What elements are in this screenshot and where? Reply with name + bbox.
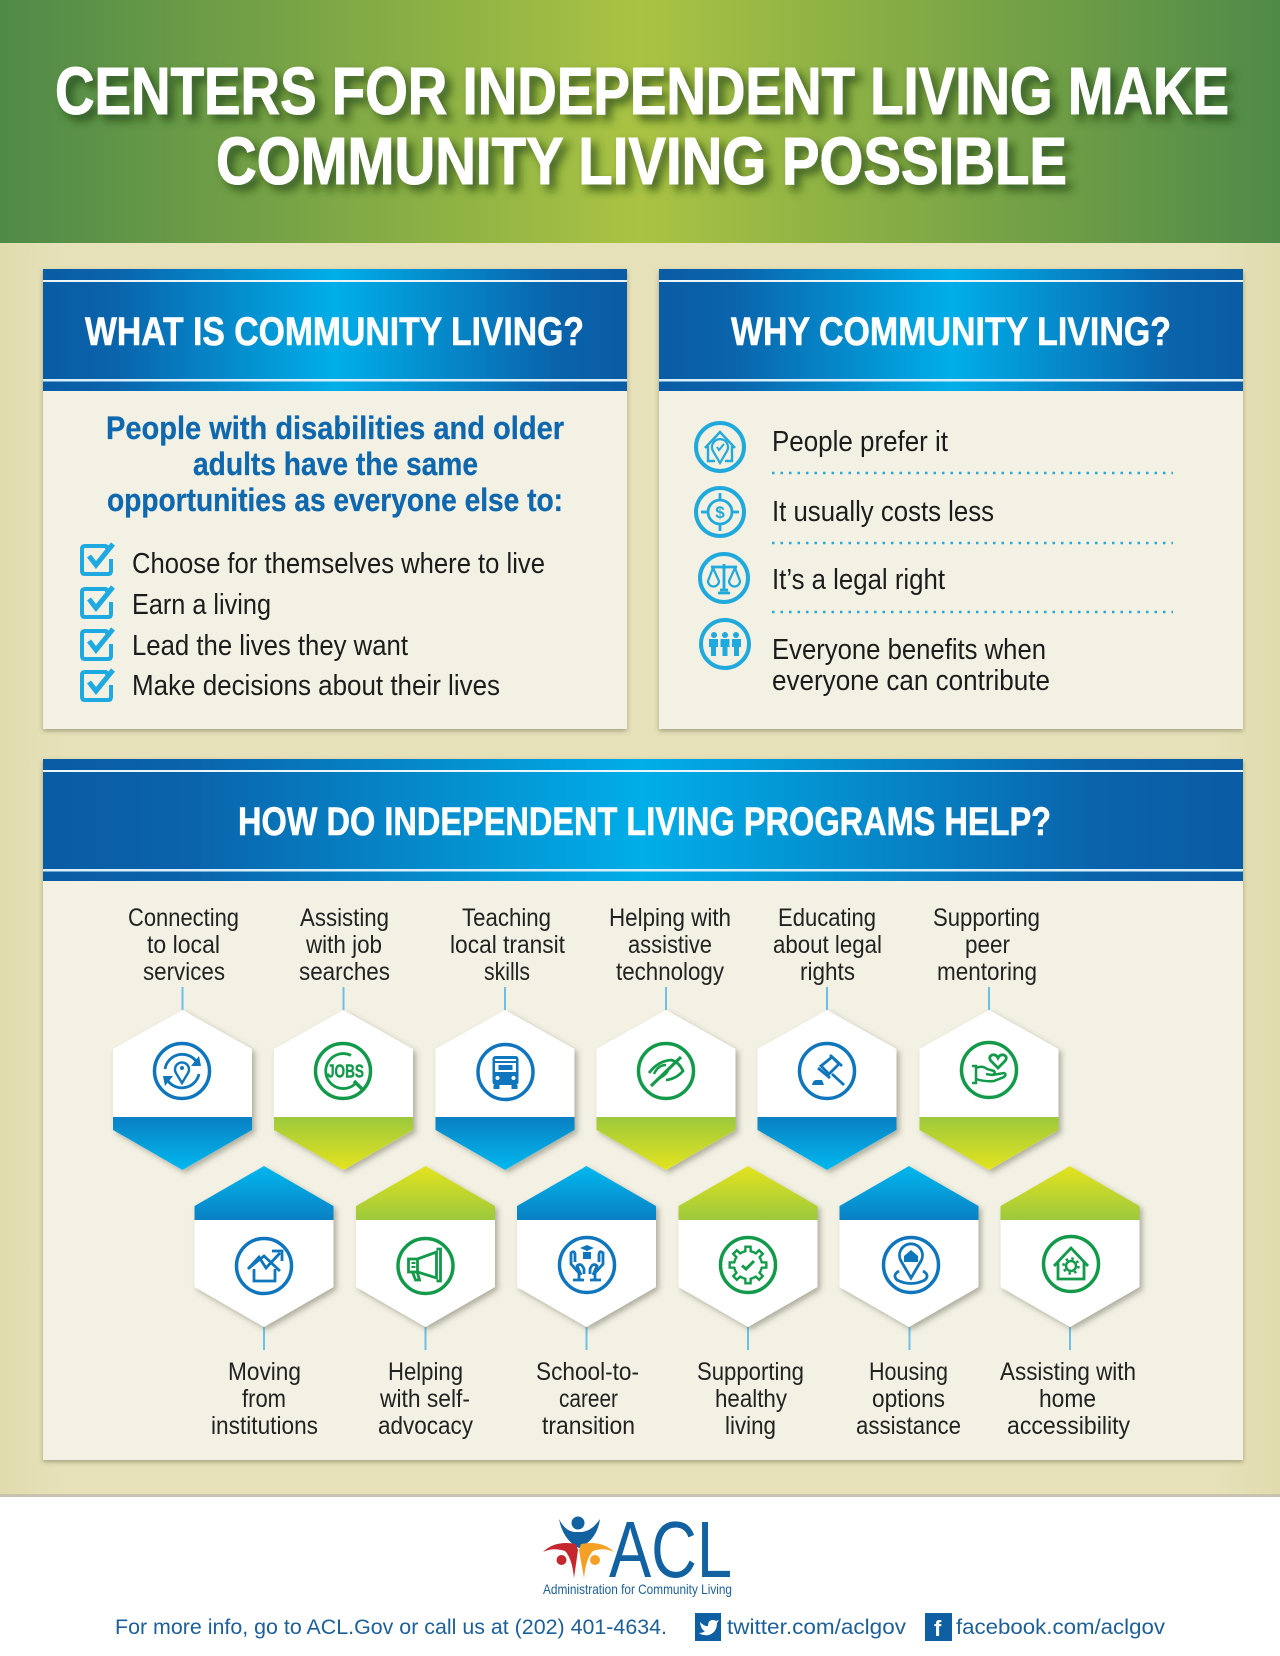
program: connecting to local services xyxy=(113,904,252,1170)
subheading: opportunities as everyone else to: xyxy=(107,482,563,518)
program: housing options assistance: options xyxy=(872,1385,945,1413)
title xyxy=(55,54,1229,199)
icon: house with gear xyxy=(1044,1236,1098,1292)
subheading: People with disabilities and older xyxy=(106,410,564,446)
ACL logo xyxy=(543,1505,732,1597)
icon: gear with check xyxy=(720,1238,776,1292)
facebook link: facebook.com/aclgov xyxy=(956,1616,1166,1639)
panel: why community living xyxy=(659,269,1243,729)
ACL logo: ACL xyxy=(609,1505,732,1594)
facebook link xyxy=(925,1613,1166,1641)
twitter link xyxy=(695,1613,907,1641)
program: moving from institutions: from xyxy=(242,1385,286,1413)
icon: megaphone xyxy=(398,1238,453,1294)
icon: gavel xyxy=(800,1044,854,1098)
panel header xyxy=(659,269,1243,391)
twitter link: twitter.com/aclgov xyxy=(727,1616,907,1639)
program: housing options assistance: Housing xyxy=(869,1358,948,1386)
reason: legal right: It’s a legal right xyxy=(772,564,945,596)
program: assisting with job searches: Assisting xyxy=(300,904,389,932)
program: educating about legal rights: about legal xyxy=(773,931,882,959)
panel: how do independent living programs help xyxy=(43,759,1243,1460)
icon: location sync xyxy=(154,1044,210,1098)
footer xyxy=(0,1494,1280,1656)
icon: eye slashed xyxy=(638,1044,694,1098)
subheading xyxy=(106,410,564,518)
program: school-to-career transition: School-to- xyxy=(536,1358,639,1386)
program: housing options assistance: assistance xyxy=(856,1412,961,1440)
program: educating about legal rights xyxy=(758,904,896,1170)
program: helping with assistive technology: Helping with xyxy=(609,904,731,932)
program: supporting healthy living: healthy xyxy=(715,1385,787,1413)
program: teaching local transit skills: skills xyxy=(484,958,530,986)
program: helping with assistive technology: technology xyxy=(616,958,724,986)
program: supporting peer mentoring: Supporting xyxy=(933,904,1040,932)
icon: jobs magnifier: JOBS xyxy=(327,1062,364,1082)
panel header xyxy=(43,759,1243,881)
program: helping with assistive technology xyxy=(596,904,736,1170)
program: helping with self-advocacy: advocacy xyxy=(378,1412,473,1440)
icon: hand with heart xyxy=(962,1042,1016,1098)
panel header: HOW DO INDEPENDENT LIVING PROGRAMS HELP? xyxy=(238,800,1051,844)
panel header xyxy=(43,269,627,391)
ACL logo: Administration for Community Living xyxy=(543,1581,732,1597)
program: teaching local transit skills xyxy=(436,904,574,1170)
subheading: adults have the same xyxy=(193,446,478,482)
program: assisting with home accessibility: home xyxy=(1039,1385,1096,1413)
reason: everyone benefits: Everyone benefits when xyxy=(772,634,1046,666)
program: assisting with job searches: with job xyxy=(305,931,382,959)
reason: legal right xyxy=(700,554,945,602)
program: assisting with home accessibility: Assisting with xyxy=(1000,1358,1136,1386)
program: supporting healthy living: living xyxy=(725,1412,776,1440)
program: helping with self-advocacy: with self- xyxy=(379,1385,470,1413)
icon: house with pin xyxy=(696,423,744,471)
program: moving from institutions: Moving xyxy=(228,1358,301,1386)
reason: costs less: It usually costs less xyxy=(772,496,994,528)
program: connecting to local services: services xyxy=(143,958,225,986)
program: supporting peer mentoring xyxy=(920,904,1058,1170)
contact line: For more info, go to ACL.Gov or call us at (202) 401-4634. xyxy=(115,1616,667,1639)
program: connecting to local services: Connecting xyxy=(128,904,239,932)
reason: costs less xyxy=(696,488,994,536)
program: school-to-career transition: career xyxy=(559,1385,618,1413)
icon: hands with graduate xyxy=(560,1238,614,1292)
icon: dollar target: $ xyxy=(715,503,725,522)
panel header: WHAT IS COMMUNITY LIVING? xyxy=(85,310,584,354)
program: teaching local transit skills: local transit xyxy=(450,931,565,959)
program: assisting with home accessibility: accessibility xyxy=(1007,1412,1130,1440)
program: moving from institutions: institutions xyxy=(211,1412,318,1440)
program: supporting peer mentoring: mentoring xyxy=(937,958,1037,986)
program: supporting healthy living: Supporting xyxy=(697,1358,804,1386)
program: connecting to local services: to local xyxy=(147,931,220,959)
check item: choose where to live: Choose for themselves where to live xyxy=(132,548,545,580)
panel: what is community living xyxy=(43,269,627,729)
title: COMMUNITY LIVING POSSIBLE xyxy=(216,124,1067,199)
program: supporting healthy living xyxy=(678,1166,818,1440)
program: assisting with job searches xyxy=(274,904,413,1170)
logo figures xyxy=(543,1516,614,1578)
check item: earn a living: Earn a living xyxy=(132,589,271,621)
program: housing options assistance xyxy=(840,1166,978,1440)
program: helping with assistive technology: assistive xyxy=(628,931,712,959)
program: school-to-career transition xyxy=(517,1166,656,1440)
facebook link: f xyxy=(934,1616,942,1641)
check item: lead the lives: Lead the lives they want xyxy=(132,630,408,662)
check item: earn a living xyxy=(82,587,271,621)
program: educating about legal rights: rights xyxy=(800,958,855,986)
icon: bus xyxy=(478,1044,533,1100)
program: helping with self-advocacy: Helping xyxy=(388,1358,463,1386)
panel header: WHY COMMUNITY LIVING? xyxy=(731,310,1171,354)
icon: jobs magnifier xyxy=(316,1044,370,1098)
check item: make decisions: Make decisions about their lives xyxy=(132,670,500,702)
program: educating about legal rights: Educating xyxy=(778,904,876,932)
reason: people prefer it xyxy=(696,423,948,471)
title banner xyxy=(0,0,1280,243)
program: moving from institutions xyxy=(194,1166,334,1440)
program: helping with self-advocacy xyxy=(356,1166,495,1440)
page background xyxy=(0,243,1280,1494)
icon: house with rising arrow xyxy=(236,1238,292,1294)
program: supporting peer mentoring: peer xyxy=(965,931,1010,959)
program: teaching local transit skills: Teaching xyxy=(462,904,551,932)
program: assisting with job searches: searches xyxy=(299,958,390,986)
icon: three people xyxy=(701,620,749,668)
icon: dollar target xyxy=(696,488,744,536)
reason: people prefer it: People prefer it xyxy=(772,426,948,458)
reason: everyone benefits xyxy=(701,620,1050,697)
program: assisting with home accessibility xyxy=(1000,1166,1140,1440)
icon: house location pin xyxy=(884,1238,938,1292)
checklist xyxy=(82,544,545,702)
reason: everyone benefits: everyone can contribute xyxy=(772,665,1050,697)
program: school-to-career transition: transition xyxy=(542,1412,635,1440)
icon: scales xyxy=(700,554,748,602)
